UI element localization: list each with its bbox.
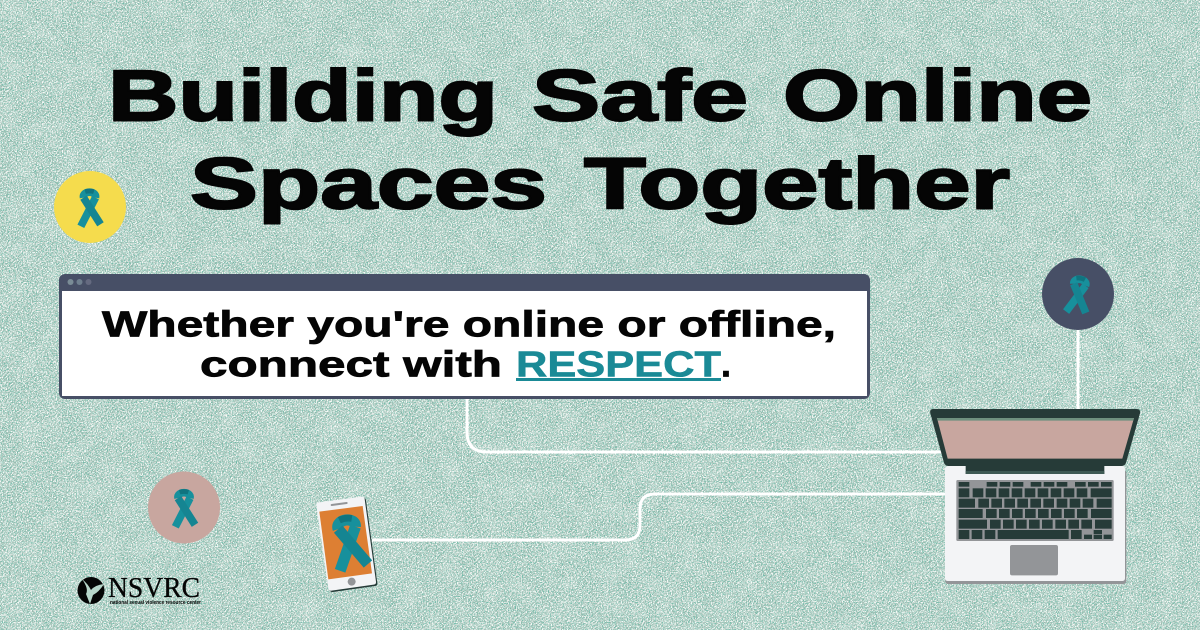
title: Online bbox=[783, 56, 1092, 136]
connector: phone to laptop bbox=[372, 494, 946, 540]
laptop trackpad bbox=[1010, 545, 1058, 575]
logo: NSVRC bbox=[78, 572, 202, 606]
laptop keyboard bbox=[956, 480, 1114, 541]
title: Spaces bbox=[190, 144, 547, 224]
connector: navy badge to laptop bbox=[1076, 325, 1080, 410]
message text: connect with bbox=[200, 344, 502, 384]
title: Together bbox=[584, 144, 1010, 224]
logo: NSVRC: NSVRC bbox=[108, 572, 200, 604]
laptop screen bbox=[930, 409, 1140, 474]
title: Safe bbox=[532, 56, 748, 136]
title bbox=[108, 56, 1092, 224]
icon: window dots bbox=[68, 279, 92, 285]
yellow ribbon badge bbox=[54, 171, 126, 243]
connector: browser to laptop bbox=[467, 398, 946, 452]
message text: . bbox=[721, 344, 731, 384]
icon: ribbon on pink bbox=[175, 492, 195, 527]
icon: globe bbox=[78, 577, 104, 604]
icon: ribbon on yellow bbox=[81, 191, 100, 226]
logo: NSVRC: national sexual violence resource center bbox=[110, 600, 202, 606]
icon: ribbon on navy bbox=[1066, 277, 1092, 315]
pink ribbon badge bbox=[148, 472, 220, 544]
icon: laptop bbox=[930, 409, 1140, 584]
laptop base bbox=[945, 466, 1126, 584]
message text bbox=[102, 304, 836, 384]
panel: browser window message bbox=[59, 274, 870, 399]
message text: RESPECT bbox=[516, 344, 721, 384]
title: Building bbox=[108, 56, 498, 136]
navy ribbon badge bbox=[1042, 258, 1114, 330]
icon: ribbon on phone bbox=[333, 516, 368, 571]
icon: phone with ribbon bbox=[316, 497, 377, 592]
message text: Whether you're online or offline, bbox=[102, 304, 836, 344]
